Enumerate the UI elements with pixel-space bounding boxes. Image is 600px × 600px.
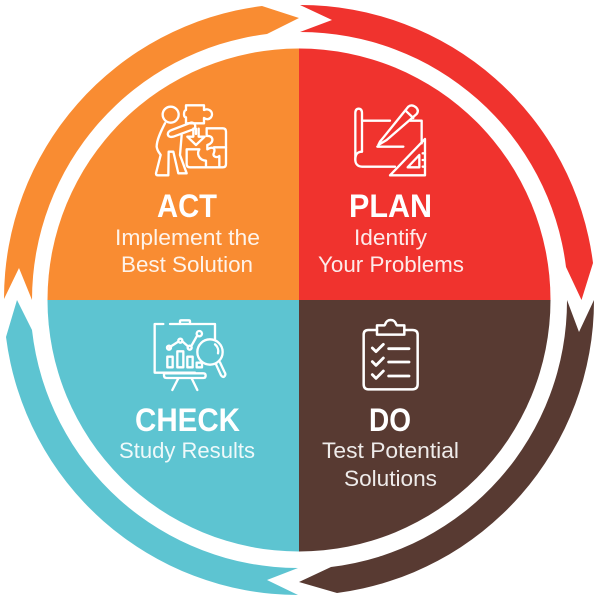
text: do description: Test Potential — [322, 438, 459, 463]
arrow: check (teal) — [6, 300, 298, 595]
text: act description: Implement the — [115, 225, 260, 250]
icon: clipboard checklist — [364, 320, 418, 389]
quadrant: act — [48, 48, 299, 300]
quadrant: do — [299, 300, 550, 552]
quadrant: check — [48, 300, 299, 552]
text: do description — [322, 438, 459, 491]
icon: chart board with magnifier — [155, 320, 225, 390]
icon: blueprint and pencil — [355, 105, 425, 175]
arrow: plan (red) — [300, 5, 593, 300]
text: plan description: Your Problems — [318, 252, 464, 277]
text: plan description: Identify — [354, 225, 427, 250]
arrow: act (orange) — [4, 6, 299, 300]
text: plan description — [318, 225, 464, 277]
icon: person with puzzle — [156, 105, 226, 175]
quadrant: plan — [299, 48, 550, 300]
arrow: do (brown) — [299, 300, 594, 593]
text: act description — [115, 225, 260, 277]
heading: ACT: ACT — [157, 188, 217, 224]
text: do description: Solutions — [344, 466, 437, 491]
heading: DO: DO — [369, 402, 411, 438]
heading: PLAN: PLAN — [349, 188, 432, 224]
heading: CHECK: CHECK — [135, 402, 240, 438]
text: act description: Best Solution — [121, 252, 253, 277]
text: check description: Study Results — [119, 438, 255, 463]
